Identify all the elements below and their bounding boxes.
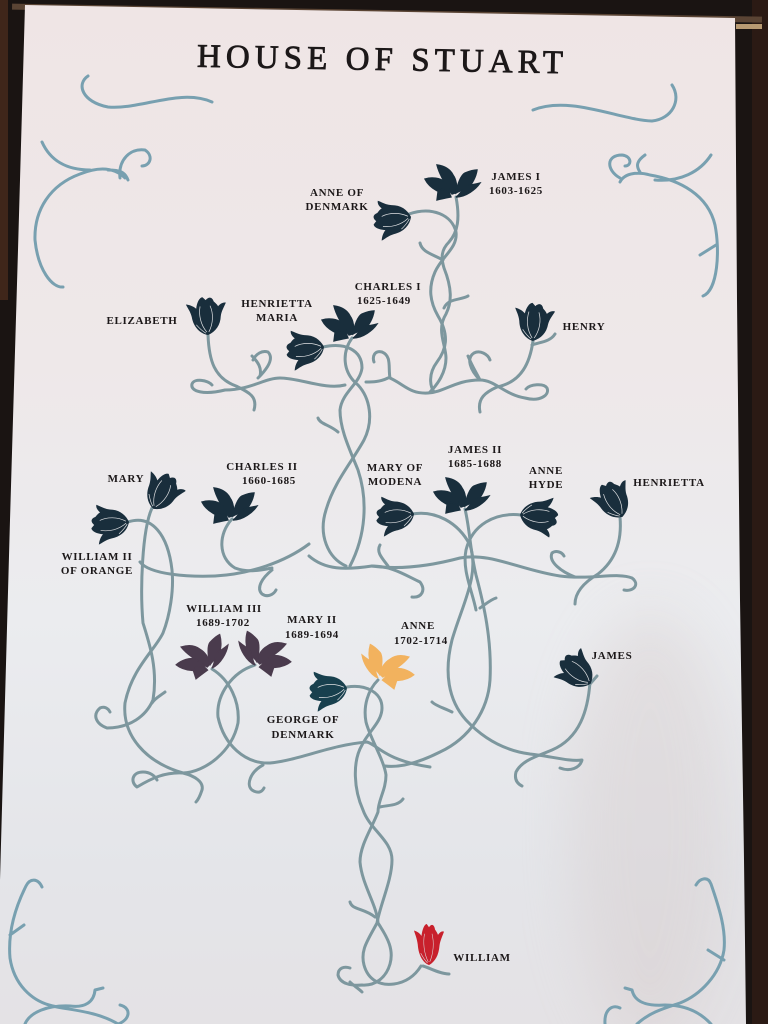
flower: Charles II	[202, 488, 257, 523]
label: William III: WILLIAM III	[186, 603, 262, 615]
label: James: JAMES	[592, 650, 632, 662]
label: Mary of Modena: MARY OF	[367, 462, 423, 474]
label: Anne Hyde: ANNE	[529, 465, 563, 477]
label: William II of Orange: OF ORANGE	[61, 565, 133, 577]
flower: James I	[425, 165, 480, 200]
label: Anne of Denmark: ANNE OF	[310, 187, 364, 199]
corner flourish: top left swash	[82, 76, 212, 107]
flower: Charles I	[322, 306, 377, 341]
label: William: WILLIAM	[453, 952, 511, 964]
corner flourish: upper left vine	[35, 142, 150, 287]
flower: Anne of Denmark	[371, 197, 413, 241]
label: Elizabeth: ELIZABETH	[106, 315, 178, 327]
label: James I: JAMES I	[491, 171, 541, 183]
label: Anne: 1702-1714	[394, 635, 448, 647]
label: Anne of Denmark: DENMARK	[306, 201, 368, 213]
flower: James II	[434, 478, 489, 513]
vine: third generation, left loop	[96, 508, 202, 802]
label: William III: 1689-1702	[196, 617, 250, 629]
flower: Anne	[355, 639, 420, 694]
flower: Henry	[513, 302, 556, 342]
vine: Charles I and Henrietta Maria twist	[318, 338, 370, 566]
left wood edge	[0, 0, 8, 300]
flower: Henrietta	[587, 474, 640, 526]
label: Henry: HENRY	[563, 321, 605, 333]
label: James I: 1603-1625	[489, 185, 543, 197]
flower: Mary II	[232, 626, 297, 681]
label: Anne Hyde: HYDE	[529, 479, 563, 491]
label: Henrietta Maria: HENRIETTA	[241, 298, 313, 310]
flower: William (red tulip)	[414, 924, 444, 965]
flower: William II of Orange	[89, 502, 131, 545]
right wood edge	[752, 0, 768, 1024]
flower: Elizabeth	[185, 296, 228, 336]
vine: third generation, right branch	[218, 665, 449, 992]
corner flourish: top right swash	[533, 85, 676, 121]
flower: William III	[170, 629, 235, 684]
label: Mary of Modena: MODENA	[368, 476, 422, 488]
vine: second generation branch	[125, 517, 636, 773]
label: Charles I: 1625-1649	[357, 295, 411, 307]
corner flourish: bottom left vine	[10, 880, 128, 1024]
title: HOUSE OF STUART	[197, 39, 563, 81]
corner flourish: bottom right vine	[605, 879, 724, 1024]
banner rod	[12, 4, 762, 23]
cloth shadow	[580, 625, 722, 1022]
label: Mary II: MARY II	[287, 614, 337, 626]
rod end	[736, 24, 762, 29]
label: Henrietta Maria: MARIA	[256, 312, 298, 324]
vine: first generation branch	[192, 334, 555, 412]
label: Mary II: 1689-1694	[285, 629, 339, 641]
flower: Anne Hyde	[518, 495, 560, 538]
flower: George of Denmark	[307, 668, 349, 712]
flower: Henrietta Maria	[284, 327, 326, 371]
label: Mary: MARY	[108, 473, 144, 485]
label: George of Denmark: GEORGE OF	[267, 714, 339, 726]
flower: Mary	[136, 466, 189, 518]
label: James II: 1685-1688	[448, 458, 502, 470]
corner flourish: upper right vine	[610, 155, 717, 296]
label: Anne: ANNE	[401, 620, 435, 632]
label: Henrietta: HENRIETTA	[633, 477, 705, 489]
label: Charles II: CHARLES II	[226, 461, 298, 473]
label: Charles I: CHARLES I	[355, 281, 421, 293]
vine: James II and Anne Hyde twist	[385, 509, 597, 786]
flower: James	[549, 643, 604, 699]
label: George of Denmark: DENMARK	[272, 729, 334, 741]
label: William II of Orange: WILLIAM II	[62, 551, 132, 563]
flower: Mary of Modena	[374, 494, 416, 537]
label: Charles II: 1660-1685	[242, 475, 296, 487]
label: James II: JAMES II	[448, 444, 502, 456]
vine: James I and Anne of Denmark twist	[409, 197, 468, 392]
